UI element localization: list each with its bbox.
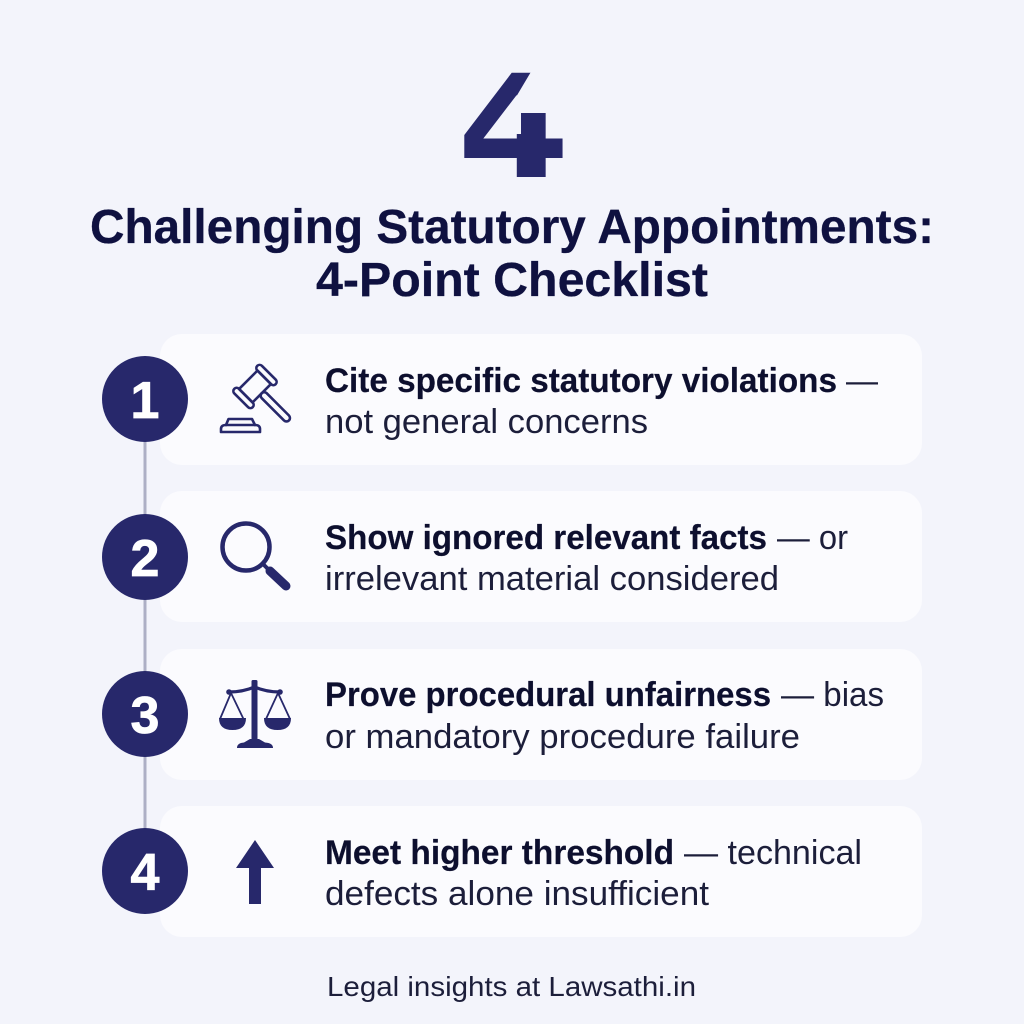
step 4 text: — technical (684, 834, 862, 872)
panel: step 2 (102, 491, 922, 622)
number badge 1 (102, 356, 188, 442)
step 1 text (325, 362, 878, 441)
step 1 text: not general concerns (325, 403, 648, 441)
step 4 text: defects alone insufficient (325, 875, 710, 913)
icon: gavel (221, 364, 303, 434)
step 2 text: — or (777, 519, 848, 557)
footer: Legal insights at Lawsathi.in (327, 971, 696, 1002)
large numeral 4: 4 (457, 44, 570, 211)
step 3 text: Prove procedural unfairness (325, 676, 771, 714)
timeline connector (144, 420, 146, 880)
icon: up arrow (236, 840, 274, 904)
card 3 background (160, 649, 922, 780)
panel: step 1 (102, 334, 922, 465)
step 3 text: or mandatory procedure failure (325, 718, 800, 756)
step 3 text: — bias (781, 676, 884, 714)
number badge 4: 4 (131, 844, 160, 902)
number badge 3: 3 (131, 687, 159, 745)
number badge 1: 1 (131, 372, 159, 430)
number badge 2: 2 (131, 530, 159, 588)
title: Challenging Statutory Appointments: (90, 201, 934, 254)
step 3 text (325, 676, 884, 756)
card 1 background (160, 334, 922, 465)
title (90, 201, 934, 307)
step 1 text: Cite specific statutory violations (325, 362, 837, 400)
icon: magnifying glass (222, 524, 286, 586)
step 4 text: Meet higher threshold (325, 834, 674, 872)
step 1 text: — (846, 362, 878, 400)
step 2 text: irrelevant material considered (325, 560, 779, 598)
step 2 text (325, 519, 848, 598)
panel: step 3 (102, 649, 922, 780)
title: 4-Point Checklist (316, 254, 708, 307)
number badge 2 (102, 514, 188, 600)
icon: scales of justice (219, 680, 291, 748)
card 4 background (160, 806, 922, 937)
number badge 4 (102, 828, 188, 914)
card 2 background (160, 491, 922, 622)
panel: step 4 (102, 806, 922, 937)
step 4 text (325, 834, 862, 913)
number badge 3 (102, 671, 188, 757)
step 2 text: Show ignored relevant facts (325, 519, 767, 557)
